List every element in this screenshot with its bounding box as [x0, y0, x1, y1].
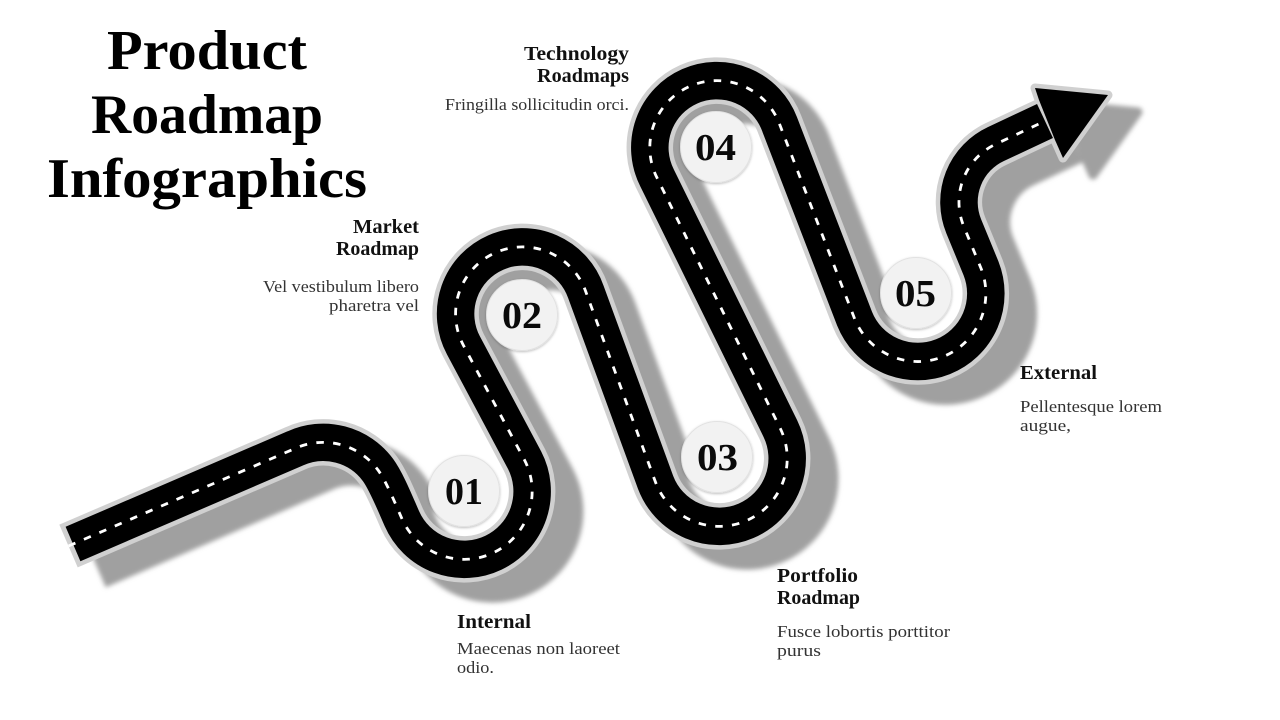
label: technology roadmaps: Roadmaps — [537, 65, 629, 87]
road shadow — [96, 101, 1138, 579]
label: external: External — [1020, 362, 1097, 384]
label: technology roadmaps — [445, 43, 629, 114]
label: portfolio roadmap — [777, 565, 950, 660]
label: technology roadmaps: Technology — [524, 43, 629, 65]
marker 03: 03 — [697, 437, 738, 479]
title: Product — [107, 20, 307, 82]
label: portfolio roadmap: purus — [777, 641, 821, 660]
label: external — [1020, 362, 1162, 435]
winding road with arrow — [68, 81, 1108, 559]
label: external: augue, — [1020, 416, 1071, 435]
marker 04 — [680, 112, 752, 182]
title: Infographics — [47, 148, 367, 210]
label: market roadmap: Market — [353, 216, 419, 238]
marker 02 — [486, 280, 558, 350]
label: market roadmap: pharetra vel — [329, 296, 419, 315]
label: technology roadmaps: Fringilla sollicitudin orci. — [445, 95, 629, 114]
label: market roadmap: Roadmap — [336, 238, 419, 260]
title — [47, 20, 367, 210]
marker 01 — [428, 456, 500, 526]
label: portfolio roadmap: Fusce lobortis porttitor — [777, 622, 950, 641]
marker 05: 05 — [895, 273, 936, 315]
marker 01: 01 — [445, 471, 483, 513]
marker 04: 04 — [695, 127, 736, 169]
label: market roadmap: Vel vestibulum libero — [263, 277, 419, 296]
marker 03 — [682, 422, 752, 492]
title: Roadmap — [91, 84, 323, 146]
label: portfolio roadmap: Roadmap — [777, 587, 860, 609]
label: portfolio roadmap: Portfolio — [777, 565, 858, 587]
label: internal: Maecenas non laoreet — [457, 639, 620, 658]
marker 02: 02 — [502, 295, 542, 337]
marker 05 — [880, 258, 952, 328]
label: internal: Internal — [457, 611, 531, 633]
label: market roadmap — [263, 216, 419, 315]
label: internal — [457, 611, 620, 677]
label: internal: odio. — [457, 658, 494, 677]
label: external: Pellentesque lorem — [1020, 397, 1162, 416]
